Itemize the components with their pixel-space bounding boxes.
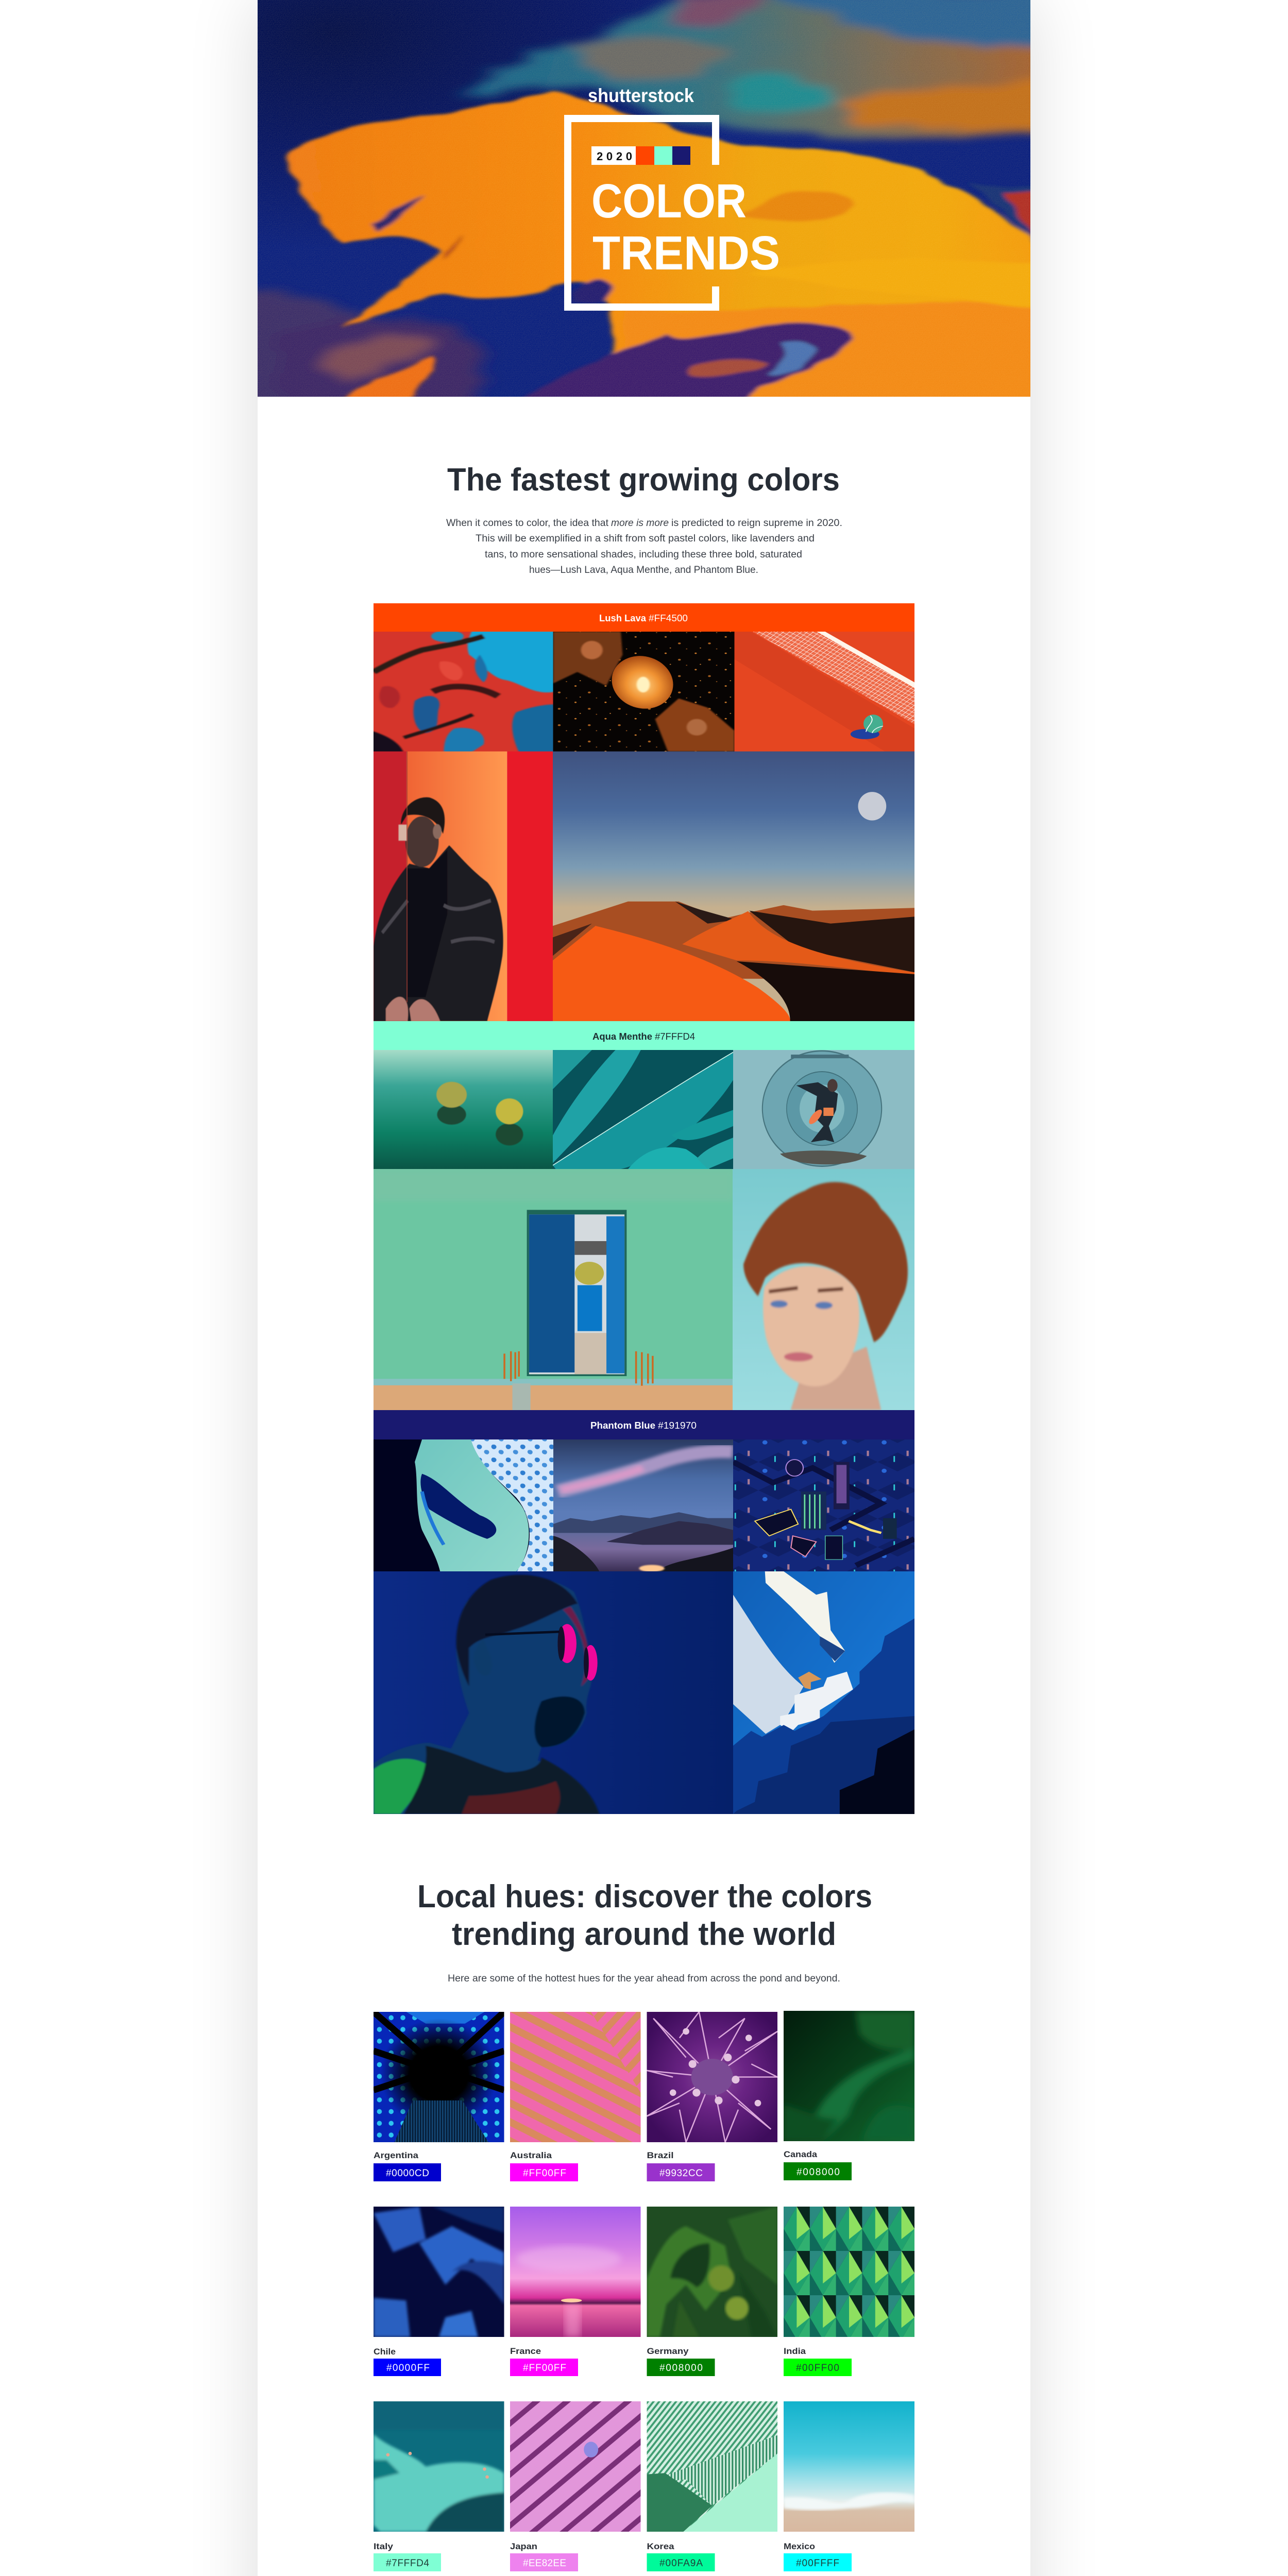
hex badge bbox=[510, 2359, 578, 2376]
photo: pink chevron facade bbox=[510, 2012, 641, 2142]
photo: white stairs against blue sky bbox=[733, 1571, 914, 1814]
photo: blue door in green wall bbox=[374, 1169, 733, 1410]
country: Korea: Korea bbox=[647, 2541, 674, 2551]
photo: rice terraces bbox=[647, 2207, 777, 2337]
hex badge bbox=[647, 2359, 715, 2376]
country: Australia: Australia bbox=[510, 2150, 552, 2160]
photo: man with pink sunglasses bbox=[374, 1571, 733, 1814]
photo: green diamond pattern bbox=[784, 2207, 914, 2337]
country: Mexico: Mexico bbox=[784, 2541, 815, 2551]
intro paragraph: hues—Lush Lava, Aqua Menthe, and Phantom Blue. bbox=[529, 565, 758, 575]
country: Canada: Canada bbox=[784, 2149, 818, 2159]
country: Chile: Chile bbox=[374, 2347, 396, 2357]
country: India: India bbox=[784, 2346, 806, 2356]
intro paragraph: more is more bbox=[611, 518, 669, 529]
intro paragraph: is predicted to reign supreme in 2020. bbox=[671, 518, 842, 529]
country: Canada bbox=[784, 2011, 914, 2180]
country grid bbox=[374, 2011, 914, 2576]
colour bar: Aqua Menthe bbox=[374, 1021, 914, 1050]
country: Italy bbox=[374, 2401, 504, 2571]
hex badge bbox=[784, 2553, 852, 2571]
hero title: COLOR bbox=[591, 174, 747, 228]
intro paragraph bbox=[446, 518, 842, 575]
intro paragraph: tans, to more sensational shades, including these three bold, saturated bbox=[485, 549, 802, 560]
photo: isometric neon city bbox=[733, 1439, 914, 1571]
hex badge bbox=[510, 2163, 578, 2181]
hex badge bbox=[647, 2553, 715, 2571]
photo: teal leaves bbox=[553, 1050, 733, 1169]
colour bar: Lush Lava: #FF4500 bbox=[649, 613, 688, 623]
heading: the fastest growing colors: The fastest growing colors bbox=[447, 462, 840, 498]
heading: local hues: Local hues: discover the colors bbox=[417, 1879, 872, 1914]
hex badge: #0000FF bbox=[386, 2363, 430, 2374]
country: Italy: Italy bbox=[374, 2541, 394, 2551]
hex badge: #008000 bbox=[796, 2167, 840, 2178]
photo: green satin bbox=[784, 2011, 914, 2141]
country: France: France bbox=[510, 2346, 541, 2356]
photo: tennis court illustration bbox=[735, 632, 914, 751]
hex badge: #00FF00 bbox=[796, 2363, 839, 2374]
country: France bbox=[510, 2207, 641, 2376]
country: Chile bbox=[374, 2207, 504, 2376]
intro paragraph: When it comes to color, the idea that bbox=[446, 518, 609, 529]
photo: pink sand waves with sphere bbox=[510, 2401, 641, 2532]
hero title: TRENDS bbox=[592, 226, 780, 280]
hero title bbox=[591, 174, 780, 280]
hex badge bbox=[510, 2553, 578, 2571]
hex badge: #00FA9A bbox=[659, 2558, 703, 2569]
hero banner bbox=[238, 0, 1051, 410]
country: India bbox=[784, 2207, 914, 2376]
colour bar: Phantom Blue: #191970 bbox=[658, 1420, 697, 1431]
country: Brazil: Brazil bbox=[647, 2150, 674, 2160]
country: Australia bbox=[510, 2012, 641, 2181]
hex badge: #FF00FF bbox=[523, 2168, 566, 2179]
panel: Lush Lava bbox=[371, 603, 914, 1021]
colour bar: Aqua Menthe: Aqua Menthe bbox=[592, 1031, 652, 1042]
hex badge: #00FFFF bbox=[796, 2558, 839, 2569]
photo: portrait with auburn hair bbox=[733, 1169, 914, 1410]
hero fluid paint artwork bbox=[258, 0, 1030, 397]
hex badge bbox=[374, 2359, 441, 2376]
photo: desert dunes and moon bbox=[553, 751, 914, 1021]
photo: turquoise sea bbox=[374, 2401, 504, 2532]
photo: man jumping through circles bbox=[733, 1050, 914, 1169]
country: Korea bbox=[647, 2401, 777, 2571]
photo: aerial agate coastline bbox=[374, 1439, 553, 1571]
white open frame bbox=[568, 118, 716, 307]
hex badge: #008000 bbox=[659, 2363, 703, 2374]
shutterstock logo: shutterstock bbox=[588, 85, 694, 106]
colour bar: Phantom Blue bbox=[374, 1410, 914, 1439]
hex badge: #7FFFD4 bbox=[386, 2558, 429, 2569]
photo: LED tunnel bbox=[374, 2012, 504, 2142]
country: Brazil bbox=[647, 2012, 777, 2181]
hex badge: #9932CC bbox=[659, 2168, 703, 2179]
page sheet with soft shadow bbox=[258, 0, 1030, 2576]
country: Japan bbox=[510, 2401, 641, 2571]
country: Japan: Japan bbox=[510, 2541, 537, 2551]
hex badge: #FF00FF bbox=[523, 2363, 566, 2374]
panel: Phantom Blue bbox=[374, 1410, 914, 1814]
intro paragraph: This will be exemplified in a shift from soft pastel colors, like lavenders and bbox=[476, 533, 815, 544]
photo: man in leather jacket bbox=[374, 751, 553, 1021]
2020 colour chip: 2020 bbox=[597, 150, 632, 163]
colour bar: Aqua Menthe: #7FFFD4 bbox=[655, 1031, 695, 1042]
panel: Aqua Menthe bbox=[374, 1021, 914, 1410]
photo: sky lantern bbox=[553, 632, 735, 751]
hex badge bbox=[784, 2162, 852, 2180]
photo: beach from above bbox=[784, 2401, 914, 2532]
colour bar: Phantom Blue: Phantom Blue bbox=[590, 1420, 655, 1431]
hex badge bbox=[374, 2163, 441, 2181]
hex badge: #0000CD bbox=[386, 2168, 429, 2179]
country: Germany: Germany bbox=[647, 2346, 689, 2356]
2020 colour chip bbox=[591, 146, 690, 165]
hex badge bbox=[374, 2553, 441, 2571]
photo: trees in green lake bbox=[374, 1050, 553, 1169]
heading: local hues: trending around the world bbox=[452, 1917, 836, 1952]
country: Mexico bbox=[784, 2401, 914, 2571]
hex badge: #EE82EE bbox=[523, 2558, 566, 2569]
country: Germany bbox=[647, 2207, 777, 2376]
country: Argentina: Argentina bbox=[374, 2150, 419, 2160]
photo: purple succulent bbox=[647, 2012, 777, 2142]
photo: blue folded ribbon bbox=[374, 2207, 504, 2337]
intro sentence: Here are some of the hottest hues for the year ahead from across the pond and beyond. bbox=[448, 1973, 840, 1984]
country: Argentina bbox=[374, 2012, 504, 2181]
photo: milky way over mountains bbox=[553, 1439, 733, 1572]
photo: pink sunset bbox=[510, 2207, 641, 2337]
hex badge bbox=[647, 2163, 715, 2181]
photo: red and blue water bbox=[374, 632, 553, 751]
photo: green striped planes bbox=[647, 2401, 777, 2532]
heading: local hues bbox=[417, 1879, 872, 1952]
colour bar: Lush Lava: Lush Lava bbox=[599, 613, 647, 623]
hex badge bbox=[784, 2359, 852, 2376]
colour bar: Lush Lava bbox=[374, 603, 914, 632]
